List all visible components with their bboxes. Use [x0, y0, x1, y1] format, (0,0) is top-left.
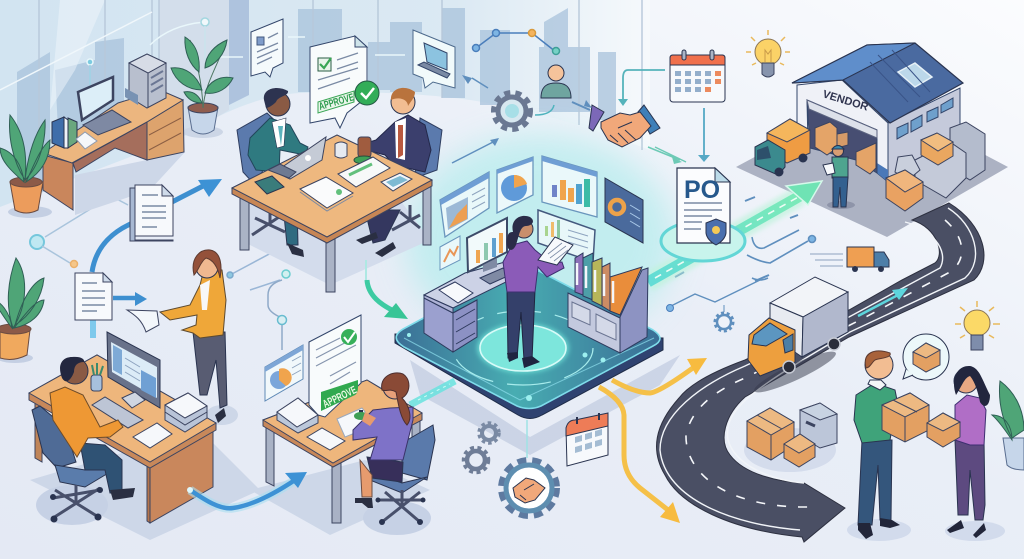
- arrow: cyan beam from desk to platform: [410, 381, 455, 405]
- bubble: approve document: [310, 36, 379, 128]
- bubble: document: [251, 19, 283, 77]
- books: [52, 117, 77, 148]
- file organiser with binders: [568, 253, 648, 353]
- document with curved blue arrow: [92, 179, 222, 272]
- desk: [263, 380, 422, 523]
- stacked boxes and machines: [886, 122, 985, 211]
- icon: person: [541, 65, 571, 98]
- arrow: glowing green beam to vendor: [648, 181, 822, 282]
- people handing boxes: [847, 351, 1005, 541]
- panel: bar chart: [542, 156, 597, 217]
- road with arrow head: [657, 203, 984, 542]
- panel: small chart card: [440, 236, 460, 270]
- panel: area chart: [440, 172, 489, 237]
- office windows and skyline: [0, 0, 650, 207]
- shield: [706, 219, 726, 245]
- laptop: [78, 77, 131, 135]
- monitor: [467, 218, 507, 272]
- woman with stamp: [353, 373, 435, 525]
- gear with network line: [666, 280, 760, 331]
- boxes and device on ground: [744, 403, 837, 472]
- front wall: [797, 80, 888, 182]
- platform workstation: [395, 216, 680, 455]
- right wall: [888, 88, 960, 182]
- icon: calendar lower: [566, 413, 608, 466]
- panel: settings gear: [605, 178, 643, 243]
- panel: pie chart: [497, 157, 533, 213]
- small truck with speed lines: [810, 247, 889, 272]
- chair and man: [32, 357, 135, 522]
- keyboard: [92, 397, 143, 428]
- delivery truck: [748, 277, 848, 398]
- man in teal jacket: [248, 88, 308, 257]
- woman at workstation: [503, 216, 573, 368]
- arrowheads: orange: [660, 358, 707, 523]
- pie chart panel: [265, 345, 303, 401]
- label: PO: PO: [684, 176, 720, 204]
- icon: gear with handshake: [501, 460, 557, 516]
- PO ring glow: [661, 221, 745, 261]
- windows: [897, 98, 953, 139]
- label: approve green: APPROVE: [321, 384, 359, 411]
- network small arrows right of PO: [675, 197, 816, 281]
- arrow: blue curved bottom: [187, 472, 307, 508]
- truck: [755, 119, 810, 176]
- monitor: [107, 332, 160, 408]
- lower-left desk scene: [29, 250, 260, 540]
- icon: handshake: [584, 100, 660, 147]
- plant: lower left: [0, 258, 44, 363]
- standing woman: [160, 250, 238, 425]
- plant: left window: [0, 115, 52, 218]
- ground: [736, 110, 1008, 237]
- top-left desk: [43, 54, 185, 215]
- desk with monitor and cabinet: [424, 218, 510, 352]
- label: vendor: VENDOR: [821, 88, 870, 114]
- bubble: laptop: [413, 30, 455, 88]
- line from platform to gear: [526, 420, 528, 458]
- stamp: [354, 137, 374, 164]
- arrows: handshake and PO: [618, 99, 710, 164]
- large box: [882, 393, 929, 442]
- paper stack and sheet: [277, 398, 375, 450]
- flying paper: [127, 310, 159, 332]
- large soft glow behind workstation: [405, 135, 675, 345]
- icon: light bulb top: [746, 30, 790, 77]
- table: [232, 135, 432, 292]
- icon: calendar top: [670, 50, 725, 102]
- panel: monitor chart right: [538, 210, 595, 262]
- door: [807, 100, 877, 173]
- roof: [792, 43, 963, 123]
- worker: [823, 146, 855, 209]
- PO document: [677, 168, 730, 245]
- arrow: small blue: [452, 75, 499, 163]
- lower-right desk scene: [250, 315, 435, 535]
- paper stack: [165, 393, 207, 432]
- arrow: cyan on road: [858, 288, 908, 316]
- pencil cup: [91, 363, 103, 391]
- network lines: [30, 18, 704, 350]
- computer tower: [125, 54, 166, 108]
- arrow: green curved into platform: [366, 260, 408, 319]
- woman in purple: [947, 366, 990, 538]
- desk: [29, 355, 216, 523]
- document small with arrow: [75, 273, 147, 338]
- man in navy suit: [356, 88, 431, 257]
- icon: light bulb lower: [955, 301, 1000, 350]
- man in green sweater: [854, 351, 900, 539]
- speech bubble with box: [903, 334, 949, 380]
- plant: beside top desk: [171, 37, 233, 138]
- chair base left: [252, 205, 285, 235]
- plant: lower right: [992, 381, 1024, 470]
- paper: [133, 423, 172, 448]
- label: approve: APPROVE: [318, 91, 355, 113]
- approve document: [309, 315, 361, 417]
- small box: [927, 413, 960, 447]
- meeting table scene: [232, 88, 442, 292]
- gears small: [464, 423, 499, 472]
- orange arrows: [599, 365, 697, 510]
- boxes in door: [815, 122, 876, 174]
- icon: gear: [494, 93, 530, 129]
- hologram panels: [440, 156, 643, 270]
- vendor warehouse: [736, 43, 1008, 237]
